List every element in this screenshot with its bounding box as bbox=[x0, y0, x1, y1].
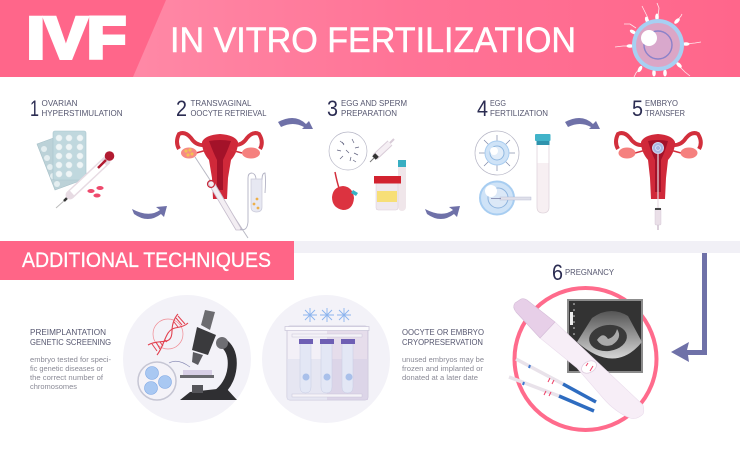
text block: oocyte or embryo cryopreservation: OOCYTE OR EMBRYO bbox=[402, 327, 484, 337]
icon: test tube bbox=[535, 134, 550, 213]
icon: syringe bbox=[370, 139, 394, 162]
text block: preimplantation genetic screening: GENETIC SCREENING bbox=[30, 337, 111, 347]
icon: pill blisters and pen bbox=[37, 131, 114, 208]
step 3 label: PREPARATION bbox=[341, 108, 397, 118]
panel: microscope and DNA bbox=[123, 295, 251, 423]
icon: DNA bbox=[148, 314, 188, 355]
icon: sample cup and tube bbox=[374, 160, 406, 211]
text block: preimplantation genetic screening bbox=[30, 327, 112, 391]
text block: oocyte or embryo cryopreservation: donated at a later date bbox=[402, 373, 478, 382]
step 2 label: TRANSVAGINAL bbox=[190, 98, 252, 108]
step 4 label: EGG bbox=[490, 98, 506, 108]
step 5 label: TRANSFER bbox=[645, 108, 685, 118]
arrow: step 2 to 3 bbox=[278, 118, 313, 129]
step 6 label: PREGNANCY bbox=[565, 267, 614, 277]
text block: preimplantation genetic screening: fic genetic diseases or bbox=[30, 364, 104, 373]
step 2 label bbox=[176, 96, 267, 121]
icon: microscope bbox=[180, 310, 237, 400]
icon: uterus with retrieval needle bbox=[177, 133, 266, 238]
step 1: ovarian hyperstimulation bbox=[30, 96, 122, 208]
icon: ultrasound scan bbox=[568, 300, 642, 372]
step 6: pregnancy bbox=[509, 260, 656, 430]
divider band bbox=[294, 241, 740, 253]
step 1 label: 1 bbox=[30, 96, 39, 121]
icon: egg with sperm in dish bbox=[475, 131, 519, 175]
step 2 label: 2 bbox=[176, 96, 187, 121]
step 5: embryo transfer bbox=[616, 96, 701, 230]
icon: test strips bbox=[509, 359, 596, 411]
step 1 label bbox=[30, 96, 122, 121]
heading: additional techniques: ADDITIONAL TECHNIQUES bbox=[22, 249, 271, 272]
pink ring bbox=[514, 288, 656, 430]
arrow: step 5 to 6 bbox=[671, 253, 707, 362]
step 3: egg and sperm preparation bbox=[327, 96, 407, 211]
step 4 label: FERTILIZATION bbox=[490, 108, 548, 118]
step 6 label: 6 bbox=[552, 260, 563, 285]
icon: pregnancy test bbox=[514, 299, 644, 419]
arrow: step 1 to 2 bbox=[132, 206, 167, 219]
step 3 label bbox=[327, 96, 407, 121]
step 6 label bbox=[552, 260, 614, 285]
arrow: step 4 to 5 bbox=[565, 118, 600, 129]
icon: sperm injection into egg bbox=[480, 182, 531, 214]
text block: preimplantation genetic screening: PREIMPLANTATION bbox=[30, 327, 106, 337]
step 2 label: OOCYTE RETRIEVAL bbox=[190, 108, 267, 118]
text block: oocyte or embryo cryopreservation: frozen and implanted or bbox=[402, 364, 484, 373]
step 5 label: 5 bbox=[632, 96, 643, 121]
heading: additional techniques bbox=[0, 241, 294, 280]
step 5 label bbox=[632, 96, 685, 121]
step 4 label bbox=[477, 96, 548, 121]
text block: oocyte or embryo cryopreservation: unused embryos may be bbox=[402, 355, 484, 364]
step 2: transvaginal oocyte retrieval bbox=[176, 96, 267, 238]
icon: egg with sperm bbox=[615, 3, 701, 77]
step 4: egg fertilization bbox=[475, 96, 550, 214]
step 1 label: HYPERSTIMULATION bbox=[42, 108, 122, 118]
text block: oocyte or embryo cryopreservation: CRYOPRESERVATION bbox=[402, 337, 483, 347]
icon: embryo cells bbox=[138, 361, 190, 400]
step 3 label: EGG AND SPERM bbox=[341, 98, 407, 108]
step 5 label: EMBRYO bbox=[645, 98, 678, 108]
text block: preimplantation genetic screening: the correct number of bbox=[30, 373, 104, 382]
header banner bbox=[0, 0, 740, 77]
step 1 label: OVARIAN bbox=[42, 98, 78, 108]
icon: snowflakes bbox=[303, 308, 351, 322]
step 4 label: 4 bbox=[477, 96, 488, 121]
icon: sperm sample dish bbox=[329, 132, 367, 170]
arrow: step 3 to 4 bbox=[425, 206, 460, 219]
text block: oocyte or embryo cryopreservation bbox=[402, 327, 484, 382]
title: IN VITRO FERTILIZATION bbox=[170, 21, 576, 60]
icon: testis organ bbox=[332, 172, 358, 210]
step 3 label: 3 bbox=[327, 96, 338, 121]
icon: uterus with embryo transfer bbox=[616, 133, 701, 230]
icon: box with tubes bbox=[285, 326, 369, 400]
panel: cryopreservation box bbox=[262, 295, 390, 423]
text block: preimplantation genetic screening: embryo tested for speci- bbox=[30, 355, 112, 364]
text block: preimplantation genetic screening: chromosomes bbox=[30, 382, 77, 391]
IVF logo: IVF bbox=[27, 6, 126, 71]
